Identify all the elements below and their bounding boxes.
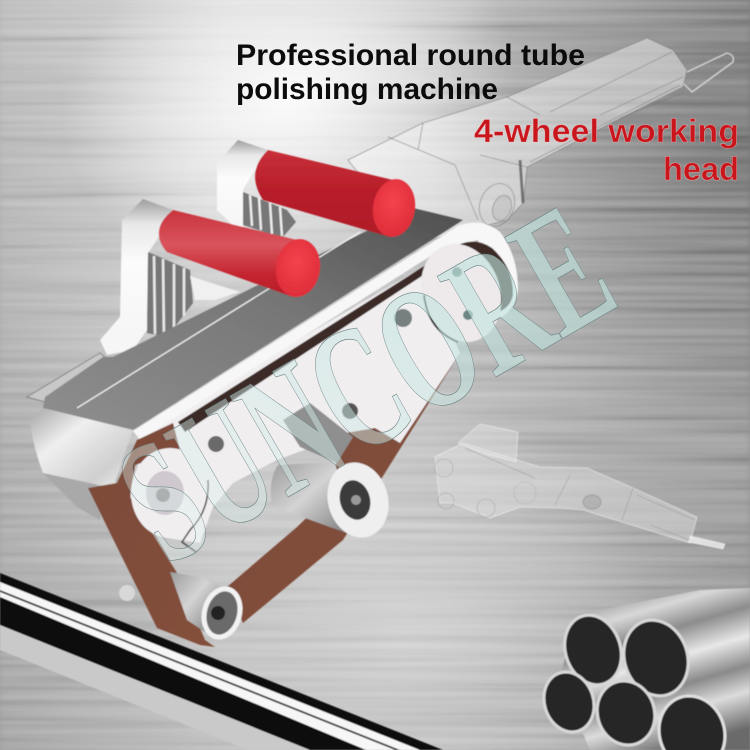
white side plate xyxy=(130,267,460,543)
title: polishing machine xyxy=(236,73,498,106)
lower left wheel xyxy=(131,448,209,552)
rail on the rear edge xyxy=(27,353,108,402)
front silver block xyxy=(30,408,133,488)
callout: 4-wheel working head xyxy=(474,113,739,187)
title: Professional round tube xyxy=(236,39,585,72)
back bracket xyxy=(217,140,296,238)
rear handle xyxy=(255,150,419,240)
abrasive belt, right run xyxy=(227,353,460,623)
title xyxy=(236,39,585,106)
centre roller xyxy=(271,456,397,544)
tube end 1 xyxy=(554,606,632,694)
top right wheel xyxy=(408,233,514,353)
abrasive belt, left run xyxy=(88,423,215,647)
sketch: assembled tool outline xyxy=(435,424,725,549)
dark belt strip xyxy=(178,242,513,432)
sketch: grinder outline behind the machine xyxy=(348,38,733,240)
belt top surface xyxy=(43,208,463,430)
callout: 4-wheel working head: head xyxy=(663,151,739,187)
tube end 4 xyxy=(587,671,665,750)
plate screws xyxy=(208,309,412,452)
tube end 5 xyxy=(648,685,736,750)
callout: 4-wheel working head: 4-wheel working xyxy=(474,113,739,149)
seam line xyxy=(77,232,360,408)
metal mount block xyxy=(283,403,353,463)
white rim along the belt xyxy=(133,223,518,440)
tube end 3 xyxy=(534,664,604,740)
polished tube, lower left xyxy=(0,573,443,750)
tube end 2 xyxy=(612,610,700,706)
tube bodies xyxy=(560,588,750,750)
machine: 4-wheel belt head xyxy=(27,140,518,647)
lower left block xyxy=(43,473,104,520)
front handle xyxy=(159,210,324,300)
bottom roller xyxy=(119,572,248,644)
front bracket xyxy=(100,199,240,355)
bundle of steel tubes xyxy=(534,588,750,750)
